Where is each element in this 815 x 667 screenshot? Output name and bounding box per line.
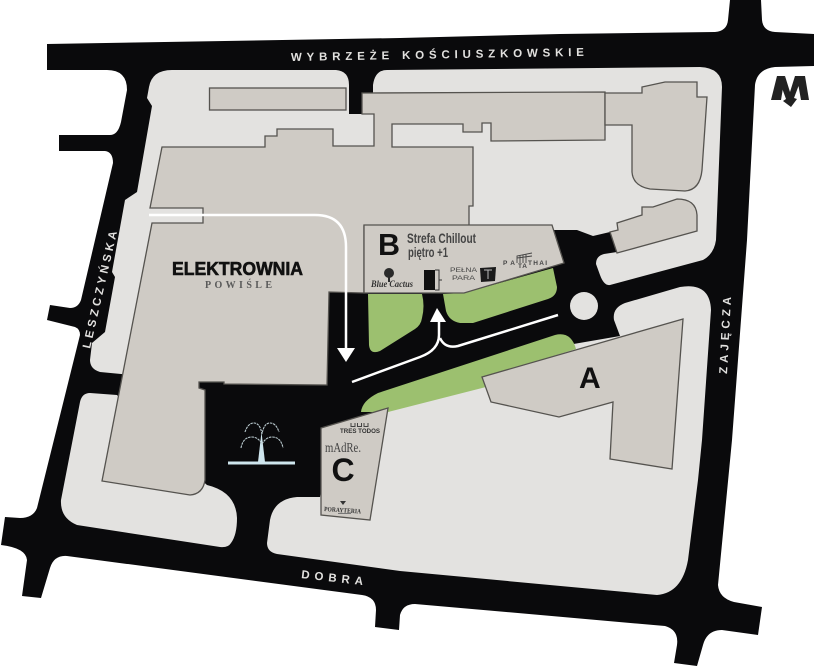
building A — [482, 319, 683, 469]
logo: Blue Cactus — [370, 268, 413, 289]
logo: Poraysteria: PORAYTERIA — [324, 506, 362, 516]
building: north-east annex — [610, 199, 697, 253]
label: floor: piętro +1 — [408, 245, 448, 260]
logo: Patathai — [503, 253, 547, 270]
street label: Dobra: DOBRA — [301, 569, 364, 588]
logo: Tres Todos: TRES TODOS — [340, 428, 381, 435]
city block: south-west — [61, 393, 237, 547]
green area: left lawn — [368, 294, 424, 352]
logo: Madre: mAdRe. — [325, 441, 361, 456]
logo: Pełna Para — [450, 267, 496, 282]
logo: Pełna Para: PEŁNA — [450, 267, 478, 274]
building: small north wing — [210, 88, 346, 110]
logo: Blue Cactus: Blue Cactus — [370, 279, 413, 289]
logo: M — [771, 76, 809, 107]
green area: right lawn — [443, 268, 557, 323]
arrow: route to building B — [352, 308, 558, 382]
street label: Wybrzeże Kościuszkowskie: WYBRZEŻE KOŚCIUSZKOWSKIE — [291, 46, 584, 64]
street label: Zajęcza: ZAJĘCZA — [718, 297, 734, 374]
building B — [364, 225, 564, 293]
logo: Patathai: THAI — [528, 260, 547, 267]
green area: lower lawn — [361, 334, 576, 412]
title: Elektrownia: ELEKTROWNIA — [172, 259, 303, 279]
label: C: C — [332, 452, 355, 488]
building: east wing — [605, 82, 707, 191]
building: Elektrownia main hall — [102, 92, 605, 495]
label: A: A — [579, 362, 601, 395]
label: B: B — [378, 228, 400, 262]
subtitle: Powiśle: POWIŚLE — [205, 279, 272, 291]
building C — [321, 408, 388, 520]
icon: door — [424, 270, 442, 290]
logo: Patathai: PA — [503, 260, 515, 267]
city block: south-east — [267, 286, 711, 595]
city block: north — [90, 67, 722, 380]
street label: Leszczyńska: LESZCZYŃSKA — [80, 230, 120, 350]
label: Strefa Chillout: Strefa Chillout — [407, 231, 476, 246]
arrow: entrance route to car park — [149, 215, 355, 362]
logo: Pełna Para: PARA — [452, 275, 476, 282]
icon: fountain — [228, 423, 295, 464]
logo: Patathai: TA — [518, 263, 527, 270]
roundabout — [570, 292, 598, 320]
